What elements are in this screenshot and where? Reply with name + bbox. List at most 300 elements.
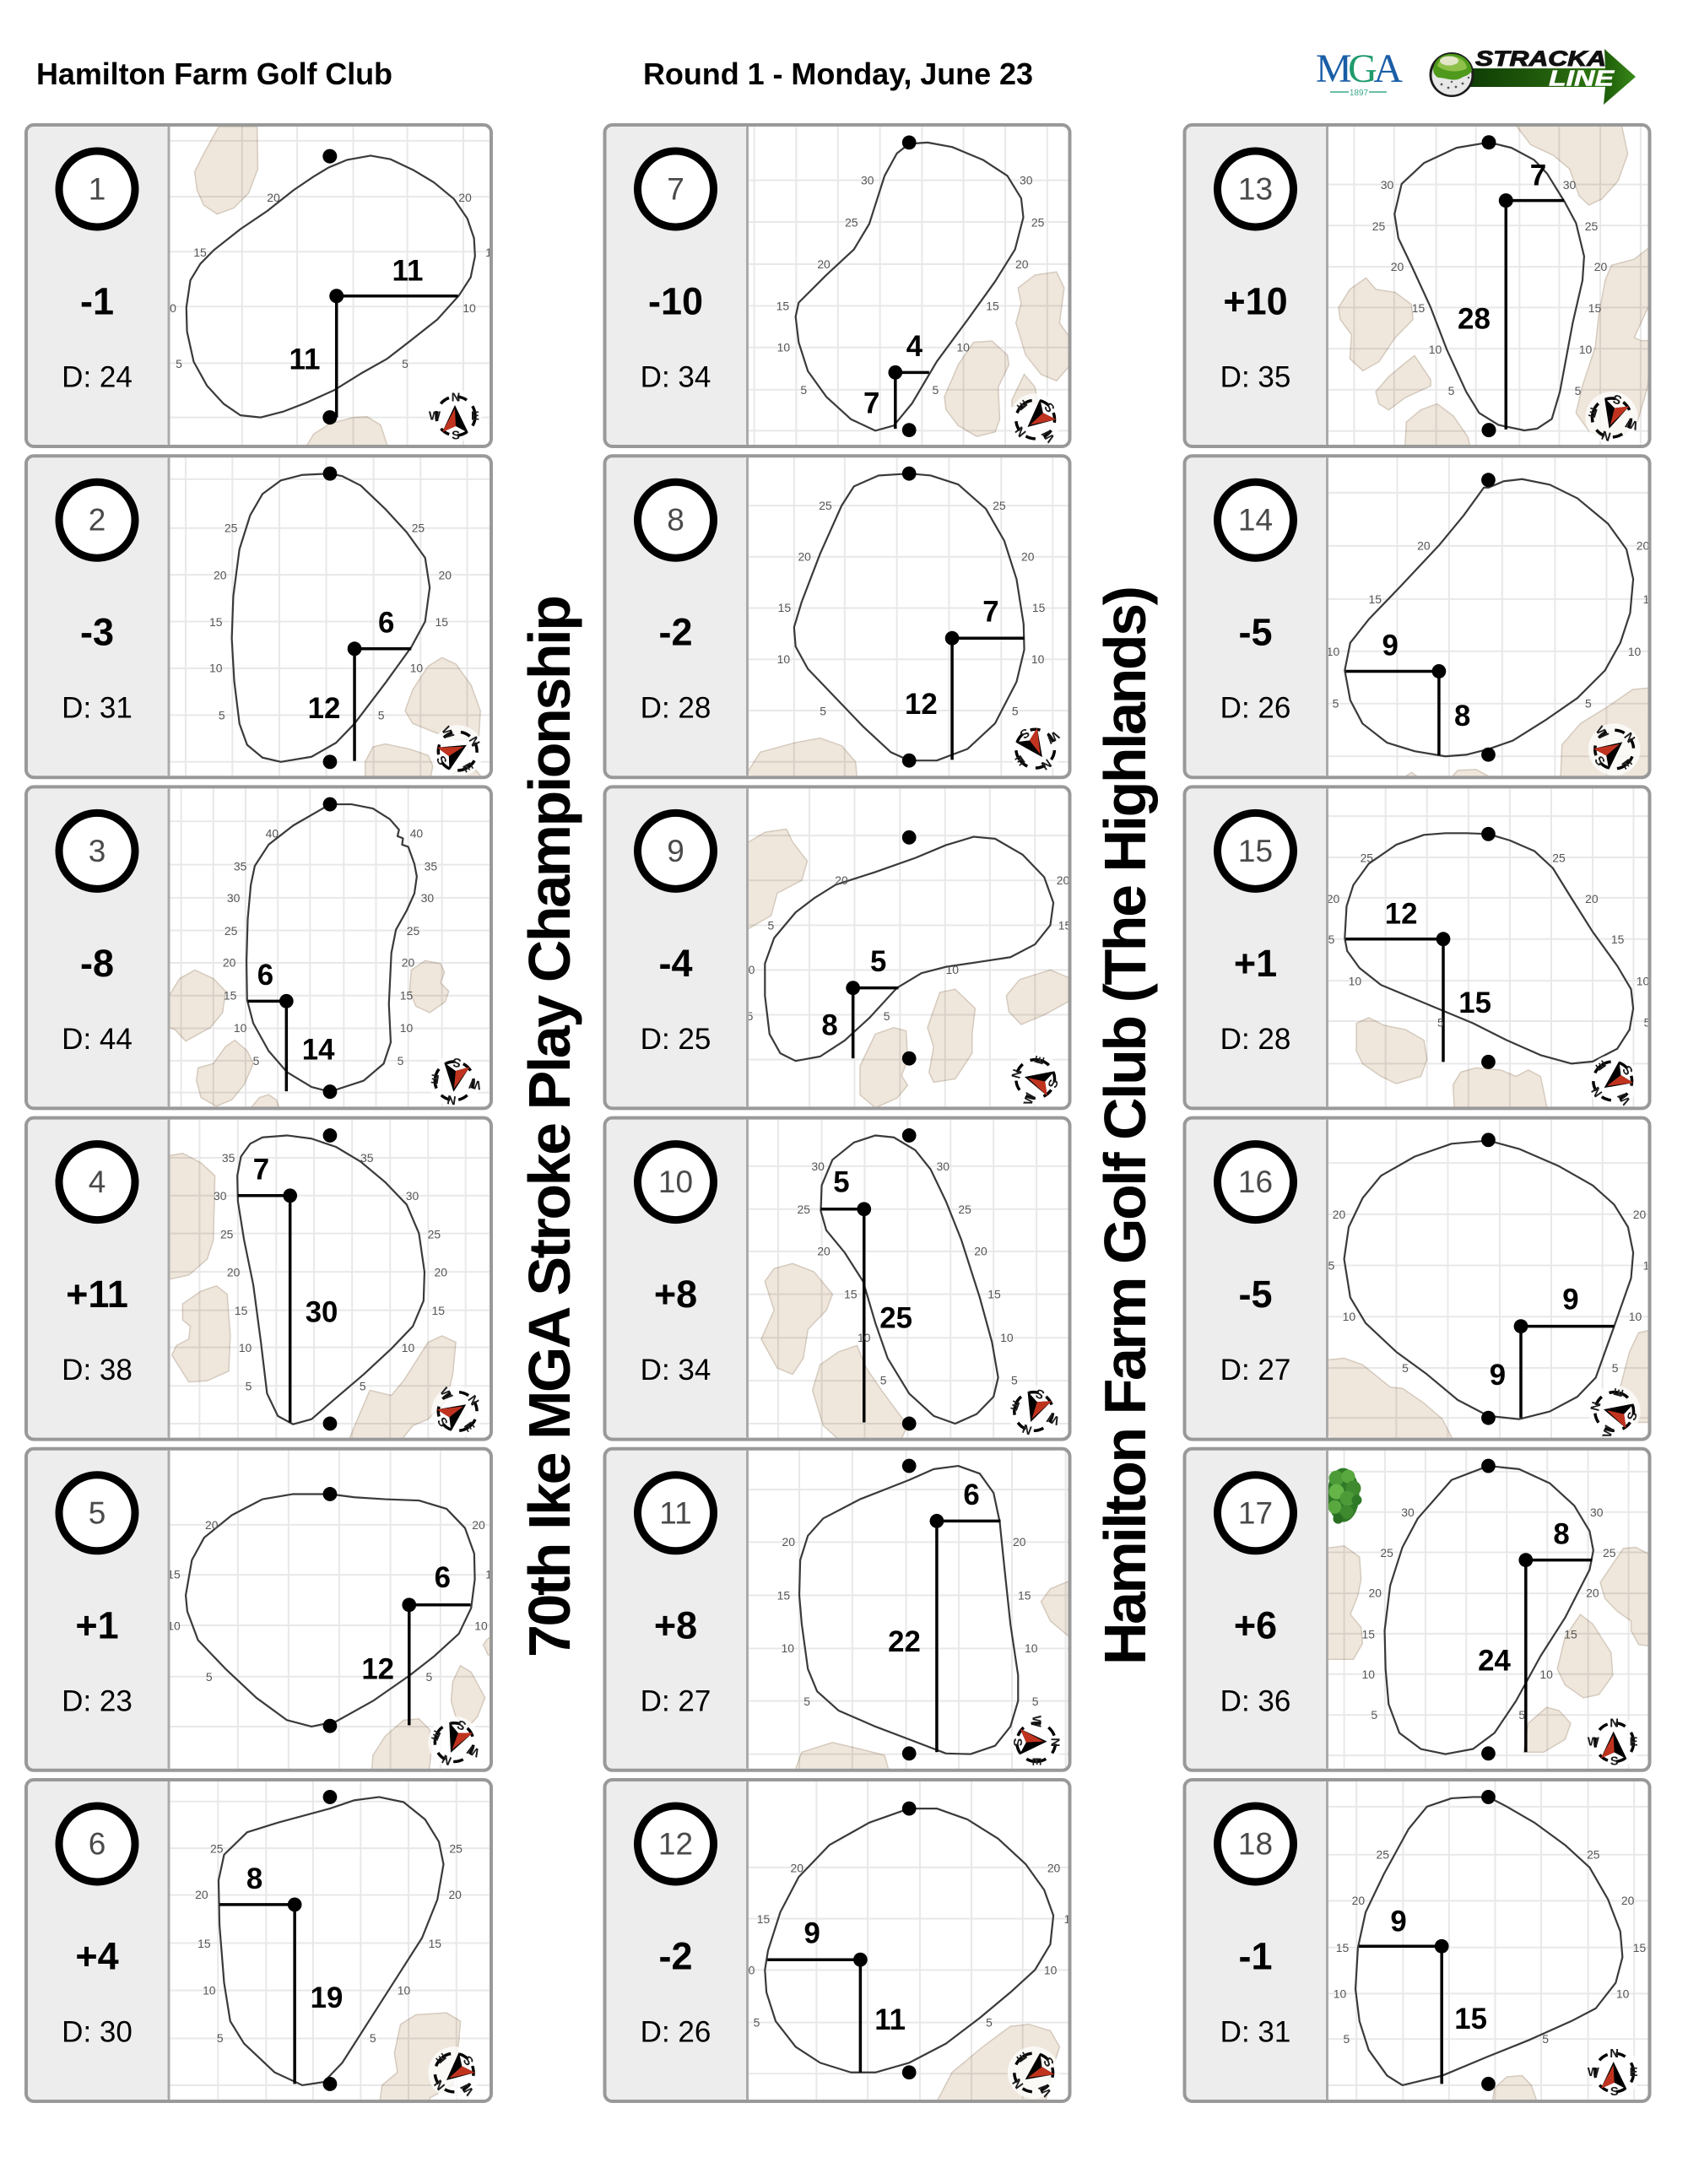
map: hole 12 green [599, 1118, 1090, 2143]
map: hole 17 green [1182, 1118, 1673, 2143]
yardage and distance labels: 5 [1518, 1708, 1525, 1722]
yardage and distance labels: 0 [170, 301, 176, 315]
yardage and distance labels: 10 [410, 662, 423, 675]
icon: compass: E [1030, 1757, 1043, 1765]
yardage and distance labels: 10 [782, 1641, 794, 1655]
icon: compass: W [1593, 724, 1611, 743]
yardage and distance labels: 15 [1611, 933, 1625, 946]
yardage and distance labels: 15 [1362, 1627, 1375, 1641]
heading: round and date: Round 1 - Monday, June 23 [643, 57, 1033, 91]
yardage and distance labels: 5 [986, 2015, 993, 2029]
green outline, bunkers and grid [1182, 0, 1688, 482]
icon: compass: S [1047, 1078, 1062, 1089]
icon: compass: S [1010, 1738, 1024, 1747]
badge: hole number: 13 [1238, 172, 1273, 206]
yardage and distance labels: 25 [1585, 219, 1598, 233]
yardage and distance labels: 10 [945, 963, 959, 976]
map: hole 15 green [1182, 451, 1673, 1132]
yardage and distance labels: 40 [410, 827, 423, 841]
green outline, bunkers and grid [1182, 451, 1673, 1132]
icon: compass [1577, 712, 1651, 786]
badge: hole number [1217, 1144, 1293, 1220]
green outline, bunkers and grid [170, 1781, 490, 2100]
logo: MGA: MGA [1316, 46, 1403, 91]
yardage and distance labels: 25 [819, 499, 832, 512]
yardage and distance labels: 25 [1603, 1546, 1616, 1560]
yardage and distance labels: 30 [1401, 1506, 1415, 1519]
yardage and distance labels: 1 [485, 1568, 492, 1581]
icon: compass: W [1043, 727, 1061, 746]
yardage and distance labels: 25 [449, 1842, 463, 1856]
yardage and distance labels: 20 [1057, 873, 1069, 887]
icon: compass [1004, 1047, 1067, 1111]
yardage and distance labels: 30 [937, 1160, 950, 1173]
yardage and distance labels: 20 [439, 568, 452, 581]
panel: hole 7 [603, 123, 1072, 448]
yardage and distance labels: 12 [361, 1653, 394, 1686]
green outline, bunkers and grid [1182, 451, 1673, 1132]
score: -8 [80, 942, 114, 985]
yardage and distance labels: 20 [1594, 260, 1607, 273]
icon: compass: W [1588, 2066, 1600, 2079]
yardage and distance labels [1327, 851, 1651, 1118]
panel: hole 1 [24, 123, 493, 448]
yardage and distance labels: 10 [239, 1341, 252, 1354]
yardage and distance labels: 25 [845, 215, 858, 229]
yardage and distance labels: 5 [820, 704, 826, 717]
icon: compass [434, 725, 481, 776]
panel: hole 6 [24, 1778, 493, 2103]
depth: D: 26 [1220, 692, 1290, 725]
yardage and distance labels: 10 [1025, 1641, 1038, 1655]
green outline, bunkers and grid [170, 127, 490, 445]
yardage and distance labels: 6 [378, 606, 394, 639]
yardage and distance labels: 20 [472, 1518, 485, 1532]
yardage and distance labels: 5 [800, 383, 807, 397]
yardage and distance labels: 5 [1402, 1361, 1409, 1375]
score: -2 [658, 611, 693, 654]
yardage and distance labels: 5 [880, 1374, 887, 1387]
yardage and distance labels: 10 [398, 1984, 411, 1997]
icon: tree [1327, 1468, 1362, 1524]
badge: hole number [638, 1144, 714, 1220]
panel: hole 12 [599, 1118, 1090, 2143]
green outline, bunkers and grid [1182, 1118, 1673, 2143]
depth: D: 23 [62, 1684, 133, 1717]
yardage and distance labels: 9 [1490, 1359, 1506, 1392]
yardage and distance labels: 20 [195, 1888, 208, 1901]
badge: hole number [1217, 482, 1293, 558]
icon: compass: W [465, 1742, 482, 1759]
yardage and distance labels: 8 [821, 1008, 838, 1041]
badge: hole number: 9 [667, 834, 684, 868]
yardage and distance labels: 20 [435, 1265, 447, 1279]
yardage and distance labels: 10 [1539, 1668, 1553, 1681]
icon: compass [1011, 393, 1058, 444]
yardage and distance labels: 5 [1437, 1015, 1444, 1029]
icon: compass: N [1588, 1401, 1604, 1413]
icon: compass: W [1045, 1410, 1061, 1427]
yardage and distance labels: 35 [234, 859, 247, 873]
icon: compass: S [1626, 1410, 1641, 1422]
yardage and distance labels: 15 [1336, 1941, 1349, 1954]
depth: D: 28 [1220, 1023, 1290, 1056]
icon: compass: N [465, 734, 482, 749]
icon: compass: S [1041, 2054, 1058, 2069]
yardage and distance labels: 5 [425, 1670, 432, 1684]
yardage and distance labels: 25 [1372, 219, 1385, 233]
depth: D: 31 [62, 692, 133, 725]
logo: Stracka Line arrow [1430, 47, 1636, 105]
yardage and distance labels: 15 [1058, 919, 1071, 933]
map: hole 18 green [1182, 1118, 1673, 2143]
yardage and distance labels: 14 [302, 1034, 335, 1067]
panel: hole 10 [599, 1118, 1090, 2143]
icon: compass: W [1623, 415, 1640, 433]
yardage and distance labels: 5 [398, 1054, 404, 1068]
icon: compass: N [446, 1092, 457, 1106]
icon: compass: W [1036, 2080, 1055, 2099]
yardage and distance labels: 25 [1587, 1847, 1600, 1861]
yardage and distance labels: 6 [435, 1561, 451, 1594]
green outline, bunkers and grid [170, 1119, 490, 1438]
yardage and distance labels: 10 [956, 340, 970, 354]
panel: hole 11 [599, 1118, 1090, 2143]
panel: hole 15 [1182, 451, 1673, 1132]
yardage and distance labels: 25 [1380, 1546, 1393, 1560]
yardage and distance labels: 1 [1064, 1912, 1071, 1926]
depth: D: 27 [1220, 1354, 1290, 1387]
yardage and distance labels: 10 [1343, 1310, 1355, 1323]
yardage and distance labels: 25 [220, 1228, 234, 1241]
icon: compass: W [1588, 1736, 1600, 1749]
badge: hole number: 15 [1238, 834, 1273, 868]
yardage and distance labels: 10 [1362, 1668, 1375, 1681]
yardage and distance labels: 15 [986, 300, 999, 313]
yardage and distance labels: 20 [205, 1518, 219, 1532]
green outline, bunkers and grid [599, 118, 1090, 1143]
icon: compass: N [464, 1393, 481, 1408]
map: hole 4 green [170, 1119, 490, 1438]
panel: hole 5 [24, 1446, 493, 1772]
icon: compass: N [452, 390, 460, 405]
icon: compass: W [436, 1386, 455, 1403]
score: +8 [654, 1273, 697, 1316]
badge: hole number [638, 1806, 714, 1882]
badge: hole number: 11 [659, 1495, 692, 1530]
yardage and distance labels: 20 [402, 956, 414, 970]
yardage and distance labels: 40 [266, 827, 279, 841]
yardage and distance labels: 30 [421, 891, 434, 905]
icon: compass: E [1009, 1397, 1022, 1413]
yardage and distance labels: 20 [1621, 1894, 1635, 1907]
yardage and distance labels: 10 [167, 1619, 181, 1632]
icon: compass: E [1015, 397, 1031, 412]
map: hole 2 green [170, 457, 490, 776]
green outline, bunkers and grid [599, 1118, 1090, 2143]
yardage and distance labels: 5 [1011, 1374, 1018, 1387]
score: -3 [80, 611, 114, 654]
yardage and distance labels: 5 [768, 919, 775, 933]
yardage and distance labels: 15 [987, 1287, 1001, 1300]
vertical title: course: Hamilton Farm Golf Club (The Highlands) [1092, 586, 1158, 1665]
yardage and distance labels: 20 [782, 1535, 795, 1549]
yardage and distance labels: 25 [225, 924, 238, 938]
yardage and distance labels: 20 [448, 1888, 462, 1901]
yardage and distance labels: 20 [1327, 892, 1340, 905]
yardage and distance labels: 20 [835, 873, 848, 887]
yardage and distance labels: 25 [412, 522, 425, 535]
icon: compass: N [1620, 730, 1637, 746]
yardage and distance labels: 20 [267, 191, 280, 204]
icon: compass: S [1034, 1386, 1047, 1401]
yardage and distance labels: 5 [360, 1380, 366, 1393]
yardage and distance labels: 15 [757, 1912, 770, 1926]
icon: compass: W [429, 408, 441, 424]
icon: compass: W [458, 2079, 477, 2098]
map: hole 8 green [749, 457, 1069, 776]
yardage and distance labels: 15 [400, 988, 414, 1002]
yardage and distance labels: 10 [777, 340, 790, 354]
yardage and distance labels: 20 [1633, 1208, 1647, 1221]
yardage and distance labels: 25 [407, 924, 419, 938]
badge: hole number [1217, 1475, 1293, 1551]
yardage and distance labels: 25 [993, 499, 1006, 512]
yardage and distance labels: 5 [833, 1166, 850, 1199]
panel: hole 9 [599, 118, 1090, 1143]
icon: compass [1588, 2046, 1641, 2099]
green outline, bunkers and grid [749, 457, 1069, 776]
icon: compass: S [1611, 391, 1623, 408]
yardage and distance labels: 1 [1643, 1259, 1650, 1273]
yardage and distance labels: 15 [1018, 1589, 1031, 1603]
map: hole 11 green [599, 1118, 1090, 2143]
yardage and distance labels: 5 [176, 357, 182, 370]
yardage and distance labels: 5 [1328, 933, 1335, 946]
yardage and distance labels: 10 [1628, 645, 1642, 658]
yardage and distance labels: 15 [1588, 301, 1601, 315]
icon: compass [1000, 1378, 1068, 1445]
badge: hole number [1217, 151, 1293, 227]
yardage and distance labels [170, 191, 492, 442]
yardage and distance labels: 30 [1381, 178, 1393, 192]
yardage and distance labels: 5 [932, 383, 939, 397]
yardage and distance labels: 10 [1579, 343, 1592, 356]
yardage and distance labels: 12 [905, 688, 938, 721]
map: hole 5 green [170, 1451, 490, 1769]
yardage and distance labels: 20 [1637, 538, 1649, 552]
yardage and distance labels: 5 [1542, 2032, 1549, 2046]
heading: club name: Hamilton Farm Golf Club [36, 57, 392, 91]
icon: compass: E [459, 761, 475, 775]
depth: D: 30 [62, 2015, 133, 2049]
green outline, bunkers and grid [170, 1451, 490, 1769]
yardage and distance labels: 5 [1612, 1361, 1619, 1375]
yardage and distance labels: 5 [1333, 696, 1339, 710]
badge: hole number [1217, 813, 1293, 889]
yardage and distance labels: 10 [474, 1619, 488, 1632]
score: +11 [66, 1273, 128, 1316]
green outline, bunkers and grid [170, 457, 490, 776]
yardage and distance labels: 10 [402, 1341, 414, 1354]
yardage and distance labels: 35 [222, 1151, 235, 1165]
icon: compass: S [1042, 399, 1058, 414]
yardage and distance labels: 10 [1429, 343, 1442, 356]
icon: compass: N [1610, 1717, 1619, 1731]
icon: compass [998, 2036, 1070, 2110]
icon: compass: S [1591, 754, 1607, 769]
score: +1 [1234, 942, 1277, 985]
yardage and distance labels: 30 [214, 1189, 227, 1203]
icon: compass: E [430, 1071, 441, 1085]
yardage and distance labels: 15 [197, 1937, 211, 1950]
yardage and distance labels: 15 [1633, 1941, 1647, 1954]
yardage and distance labels: 5 [884, 1009, 890, 1023]
map: hole 14 green [1182, 451, 1673, 1132]
map: hole 10 green [599, 1118, 1090, 2143]
icon: compass: E [1612, 1387, 1627, 1398]
icon: compass: W [1601, 1424, 1617, 1439]
icon: compass: N [1589, 1084, 1605, 1099]
yardage and distance labels: 0 [749, 1964, 755, 1977]
yardage and distance labels: 10 [1000, 1331, 1014, 1344]
yardage and distance labels: 20 [791, 1861, 803, 1874]
yardage and distance labels: 20 [817, 257, 830, 271]
badge: hole number [59, 1806, 135, 1882]
yardage and distance labels: 10 [858, 1331, 871, 1344]
yardage and distance labels: 20 [223, 956, 236, 970]
yardage and distance labels: 15 [1032, 601, 1046, 614]
badge: hole number: 3 [89, 834, 106, 868]
score: -5 [1238, 611, 1273, 654]
yardage and distance labels: 20 [817, 1245, 830, 1258]
yardage and distance labels [778, 501, 1060, 770]
yardage and distance labels: 15 [436, 615, 448, 629]
yardage and distance labels: 25 [225, 522, 238, 535]
yardage and distance labels [209, 522, 493, 787]
yardage and distance labels: 30 [1020, 174, 1033, 187]
yardage and distance labels: 15 [432, 1304, 445, 1317]
yardage and distance labels: 15 [778, 601, 791, 614]
yardage and distance labels: 20 [974, 1245, 987, 1258]
map: hole 13 green [1182, 0, 1688, 482]
yardage and distance labels: 15 [844, 1287, 858, 1300]
badge: hole number [638, 1475, 714, 1551]
yardage and distance labels: 25 [1552, 851, 1566, 864]
icon: compass: W [1022, 1091, 1038, 1106]
yardage and distance labels: 5 [246, 1380, 252, 1393]
score: -10 [648, 280, 703, 322]
yardage and distance labels: 5 [1344, 2032, 1350, 2046]
map: hole 16 green [1182, 1118, 1673, 2143]
icon: compass: N [1610, 2047, 1619, 2061]
score: +10 [1223, 280, 1288, 322]
badge: hole number [59, 482, 135, 558]
icon: compass: E [430, 1727, 443, 1743]
yardage and distance labels: 25 [428, 1228, 441, 1241]
yardage and distance labels: 0 [749, 963, 755, 976]
yardage and distance labels: 8 [1553, 1518, 1570, 1551]
yardage and distance labels: 30 [1590, 1506, 1604, 1519]
panel: hole 3 [24, 785, 493, 1111]
yardage and distance labels: 25 [958, 1203, 971, 1216]
badge: hole number [59, 151, 135, 227]
yardage and distance labels: 11 [392, 255, 424, 287]
yardage and distance labels: 8 [1454, 700, 1470, 733]
icon: compass [1013, 727, 1060, 770]
yardage and distance labels: 30 [1563, 178, 1576, 192]
icon: compass: S [1017, 725, 1031, 741]
yardage and distance labels: 10 [1637, 975, 1649, 988]
yardage and distance labels: 19 [311, 1981, 343, 2014]
badge: hole number [638, 482, 714, 558]
yardage and distance labels [797, 1160, 1068, 1445]
yardage and distance labels [196, 1845, 478, 2098]
green outline, bunkers and grid [1182, 1118, 1673, 2143]
yardage and distance labels: 11 [289, 343, 321, 376]
yardage and distance labels: 15 [1369, 592, 1382, 606]
yardage and distance labels: 20 [798, 549, 811, 563]
yardage and distance labels: 30 [861, 174, 874, 187]
yardage and distance labels [1362, 1506, 1641, 1768]
badge: hole number: 6 [89, 1826, 106, 1862]
icon: compass: S [452, 1055, 462, 1069]
icon: compass: S [461, 2052, 477, 2068]
yardage and distance labels: 15 [167, 1568, 181, 1581]
depth: D: 25 [641, 1023, 711, 1056]
yardage and distance labels [1328, 1208, 1650, 1444]
yardage and distance labels [1372, 159, 1645, 451]
icon: compass: E [471, 408, 479, 424]
depth: D: 28 [641, 692, 711, 725]
yardage and distance labels: 30 [306, 1296, 338, 1329]
yardage and distance labels: 15 [429, 1937, 441, 1950]
yardage and distance labels: 15 [235, 1304, 248, 1317]
badge: hole number: 8 [667, 503, 684, 538]
badge: hole number [59, 1144, 135, 1220]
badge: hole number [1217, 1806, 1293, 1882]
icon: compass: E [1630, 2066, 1638, 2079]
score: -1 [80, 280, 114, 322]
yardage and distance labels: 5 [1575, 384, 1582, 397]
yardage and distance labels: 10 [1031, 652, 1045, 666]
yardage and distance labels: 10 [1629, 1310, 1642, 1323]
icon: compass: S [455, 1716, 468, 1733]
yardage and distance labels: 4 [906, 330, 923, 363]
yardage and distance labels: 30 [406, 1189, 419, 1203]
yardage and distance labels: 25 [879, 1302, 912, 1335]
badge: hole number: 4 [89, 1165, 106, 1199]
yardage and distance labels: 5 [754, 2015, 760, 2029]
yardage and distance labels: 5 [870, 945, 886, 978]
badge: hole number: 1 [89, 172, 106, 206]
vertical title: championship: 70th Ike MGA Stroke Play Championship [517, 595, 582, 1657]
yardage and distance labels: 5 [1585, 696, 1592, 710]
icon: compass: N [1013, 424, 1030, 439]
icon: compass: N [432, 2077, 448, 2092]
yardage and distance labels: 22 [888, 1625, 921, 1658]
yardage and distance labels: 7 [253, 1154, 269, 1187]
yardage and distance labels: 7 [982, 596, 999, 629]
icon: compass: E [1012, 752, 1027, 768]
yardage and distance labels: 20 [1585, 892, 1599, 905]
icon: compass: E [1033, 1054, 1048, 1066]
icon: compass: N [1048, 1738, 1062, 1747]
badge: hole number: 5 [89, 1495, 106, 1530]
map: hole 6 green [170, 1781, 490, 2100]
badge: hole number [59, 813, 135, 889]
yardage and distance labels: 10 [777, 652, 790, 666]
